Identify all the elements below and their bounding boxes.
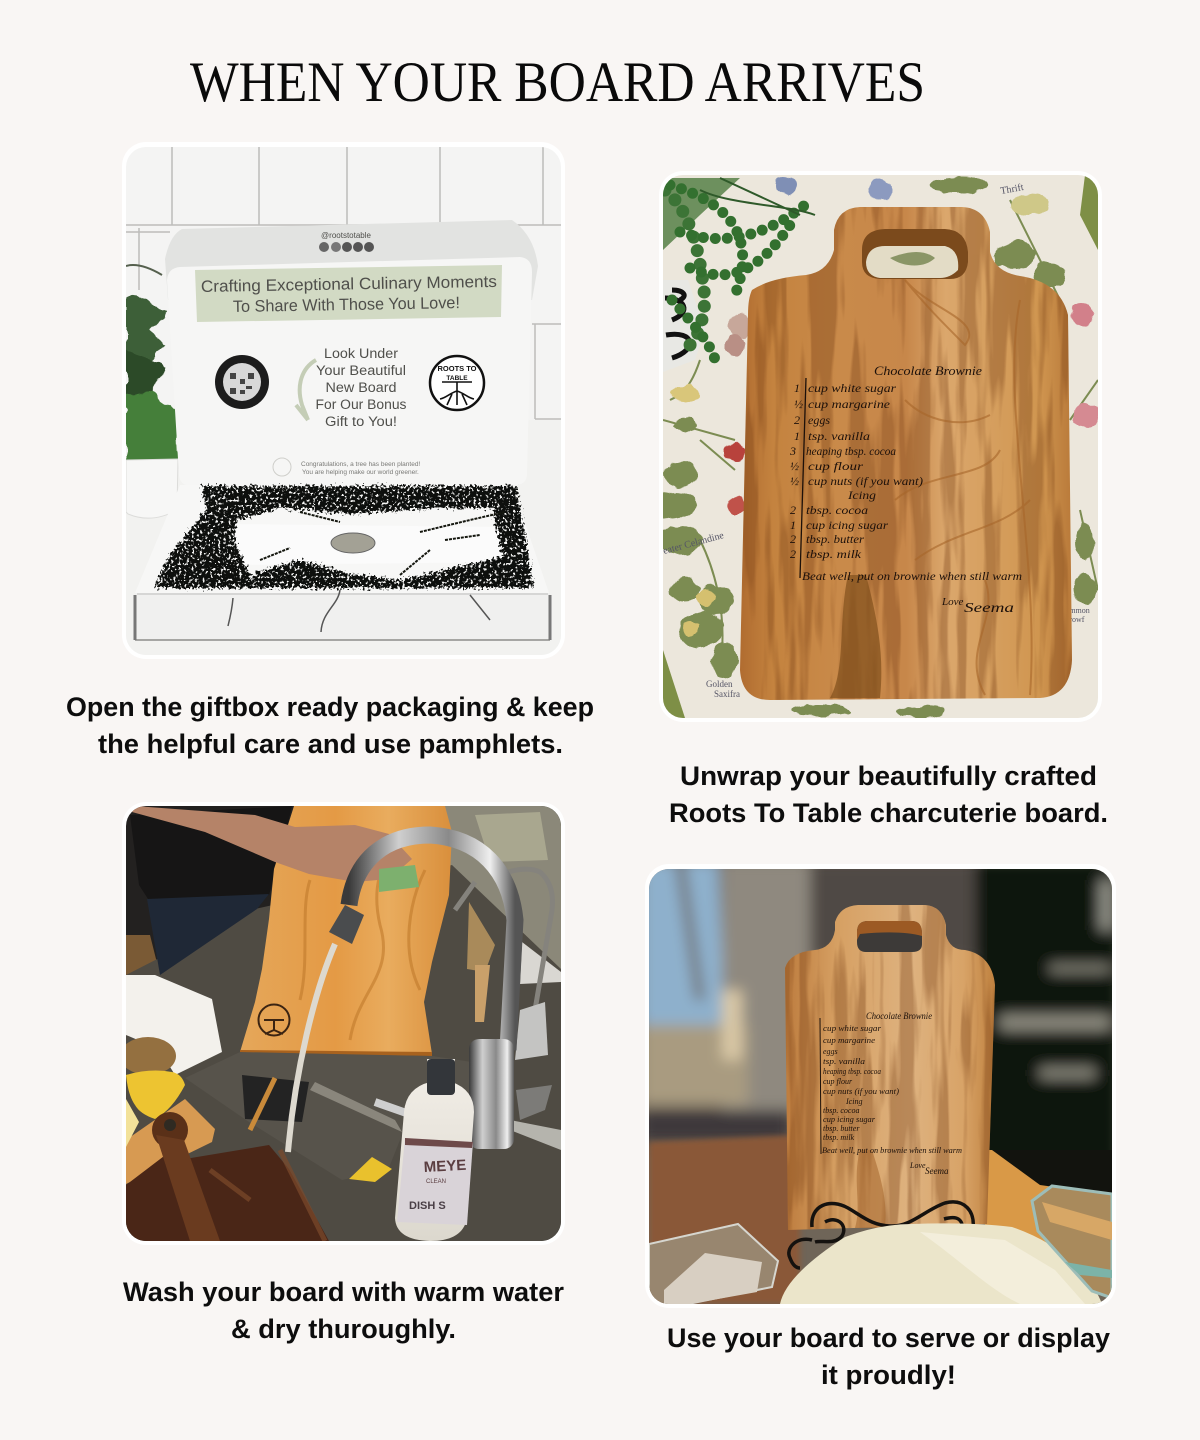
engraved handwritten recipe: 1 [790,518,796,532]
floral tea towel: Golden [706,679,733,689]
engraved handwritten recipe: tsp. vanilla [808,429,870,443]
title: WHEN YOUR BOARD ARRIVES [190,51,925,114]
engraved handwritten recipe: cup nuts (if you want) [823,1087,899,1096]
engraved handwritten recipe: cup white sugar [808,381,896,395]
dish soap bottle: CLEAN [426,1179,446,1185]
box lid with printed message: New Board [326,380,396,395]
dish soap bottle [395,1059,474,1241]
caption: step unwrap: Roots To Table charcuterie board. [669,798,1108,828]
engraved handwritten recipe [789,363,1022,616]
engraved handwritten recipe: ½ [794,397,803,411]
green sponge cloth [379,865,419,892]
engraved handwritten recipe: tbsp. milk [806,547,862,561]
box lid with printed message: Crafting Exceptional Culinary Moments [201,273,497,296]
dish soap bottle: MEYE [423,1157,467,1176]
floral tea towel [655,175,1098,718]
caption: step wash: & dry thuroughly. [231,1314,456,1344]
engraved handwritten recipe: Seema [964,601,1014,616]
caption: step serve [667,1323,1110,1390]
caption: step wash: Wash your board with warm water [123,1277,564,1307]
engraved handwritten recipe: Beat well, put on brownie when still warm [822,1146,962,1155]
box lid with printed message [165,220,538,486]
box lid with printed message: To Share With Those You Love! [233,294,460,316]
engraved handwritten recipe: tbsp. butter [823,1124,860,1133]
wooden table [649,1135,1112,1304]
engraved handwritten recipe: tbsp. cocoa [823,1106,859,1115]
planted tree note: You are helping make our world greener. [302,469,419,476]
display board [785,905,995,1230]
engraved handwritten recipe: 3 [789,444,796,458]
icon: Roots To Table logo: ROOTS TO [437,364,477,373]
engraved handwritten recipe: 2 [790,547,796,561]
engraved handwritten recipe: tbsp. milk [823,1133,855,1142]
panel: wash the board photo [120,802,565,1245]
charcuterie board [740,207,1072,700]
caption: step wash [123,1277,564,1344]
engraved handwritten recipe: Love [941,596,964,608]
engraved handwritten recipe: Beat well, put on brownie when still warm [802,569,1022,583]
engraved handwritten recipe: ½ [790,474,799,488]
engraved handwritten recipe: Icing [847,488,876,502]
engraved handwritten recipe: Seema [925,1166,949,1176]
box lid with printed message: For Our Bonus [316,397,407,412]
black iron stand [789,1202,973,1268]
water stream [288,944,335,1152]
engraved handwritten recipe: 1 [794,381,800,395]
person in dark shirt [130,806,292,975]
engraved handwritten recipe: cup margarine [808,397,891,411]
caption: step serve: Use your board to serve or display [667,1323,1110,1353]
panel: serve or display photo [640,860,1120,1308]
engraved handwritten recipe: Icing [845,1097,862,1106]
panel: open the giftbox photo [122,142,565,659]
icon: Roots To Table logo [430,356,484,410]
engraved handwritten recipe: heaping tbsp. cocoa [806,444,896,458]
floral tea towel: Crowf [1064,615,1085,624]
engraved handwritten recipe: eggs [808,413,830,427]
engraved handwritten recipe: heaping tbsp. cocoa [823,1067,881,1076]
floral tea towel: Common [1060,606,1090,615]
icon: potted plant [126,265,178,518]
floral tea towel: eater Celandine [662,530,726,557]
engraved handwritten recipe: cup icing sugar [823,1115,876,1124]
caption: step unwrap: Unwrap your beautifully crafted [680,761,1097,791]
engraved handwritten recipe: cup white sugar [823,1024,882,1033]
wooden spoon, brush and paper [467,902,561,1150]
caption: step open: the helpful care and use pamphlets. [98,729,563,759]
cream mixing bowl [780,1223,1102,1304]
caption: step serve: it proudly! [821,1360,956,1390]
engraved handwritten recipe: Chocolate Brownie [866,1011,932,1021]
engraved handwritten recipe: Chocolate Brownie [874,363,982,378]
engraved handwritten recipe: cup flour [808,459,863,473]
box lid with printed message: Look Under [324,346,399,361]
kitchen towel and produce [120,975,222,1184]
dish soap bottle: DISH S [409,1200,446,1212]
engraved handwritten recipe: cup icing sugar [806,518,888,532]
zebra vase and string-of-pearls plant [663,178,815,372]
chrome faucet [329,835,552,1149]
engraved handwritten recipe: eggs [823,1047,838,1056]
box lid with printed message: @rootstotable [321,231,372,240]
box lid with printed message: Your Beautiful [316,363,406,378]
icon: QR code seal [215,355,269,409]
live-edge maple board [240,806,452,1056]
floral tea towel: Thrift [1000,182,1025,197]
dark stone counter [126,865,561,1241]
engraved handwritten recipe: 2 [790,532,796,546]
sink basin [240,1052,429,1182]
glass measuring cup [1032,1186,1112,1298]
engraved handwritten recipe: Love [909,1161,926,1170]
giftbox tray [135,485,550,640]
engraved handwritten recipe: 2 [794,413,800,427]
caption: step open: Open the giftbox ready packaging & keep [66,692,594,722]
engraved handwritten recipe: tbsp. cocoa [806,503,868,517]
icon: Roots To Table logo: TABLE [446,375,468,382]
engraved handwritten recipe: cup margarine [823,1036,875,1045]
engraved handwritten recipe: tbsp. butter [806,532,864,546]
engraved handwritten recipe [820,1011,962,1176]
caption: step unwrap [669,761,1108,828]
floral tea towel: Saxifra [714,689,740,699]
box lid with printed message: Gift to You! [325,414,397,429]
black shredded paper [154,486,534,632]
walnut cutting board [126,1112,329,1241]
blurred kitchen background [649,869,1112,1150]
planted tree note [273,458,420,476]
caption: step open [66,692,594,759]
engraved handwritten recipe: cup flour [823,1077,853,1086]
engraved handwritten recipe: ½ [790,459,799,473]
engraved handwritten recipe: 2 [790,503,796,517]
glass dish with flour [649,1224,778,1304]
planted tree note: Congratulations, a tree has been planted! [301,461,420,468]
engraved handwritten recipe: tsp. vanilla [823,1057,865,1066]
engraved handwritten recipe: cup nuts (if you want) [808,474,923,488]
arm and hand [132,806,412,882]
engraved handwritten recipe: 1 [794,429,800,443]
panel: unwrap the board photo [655,171,1102,722]
